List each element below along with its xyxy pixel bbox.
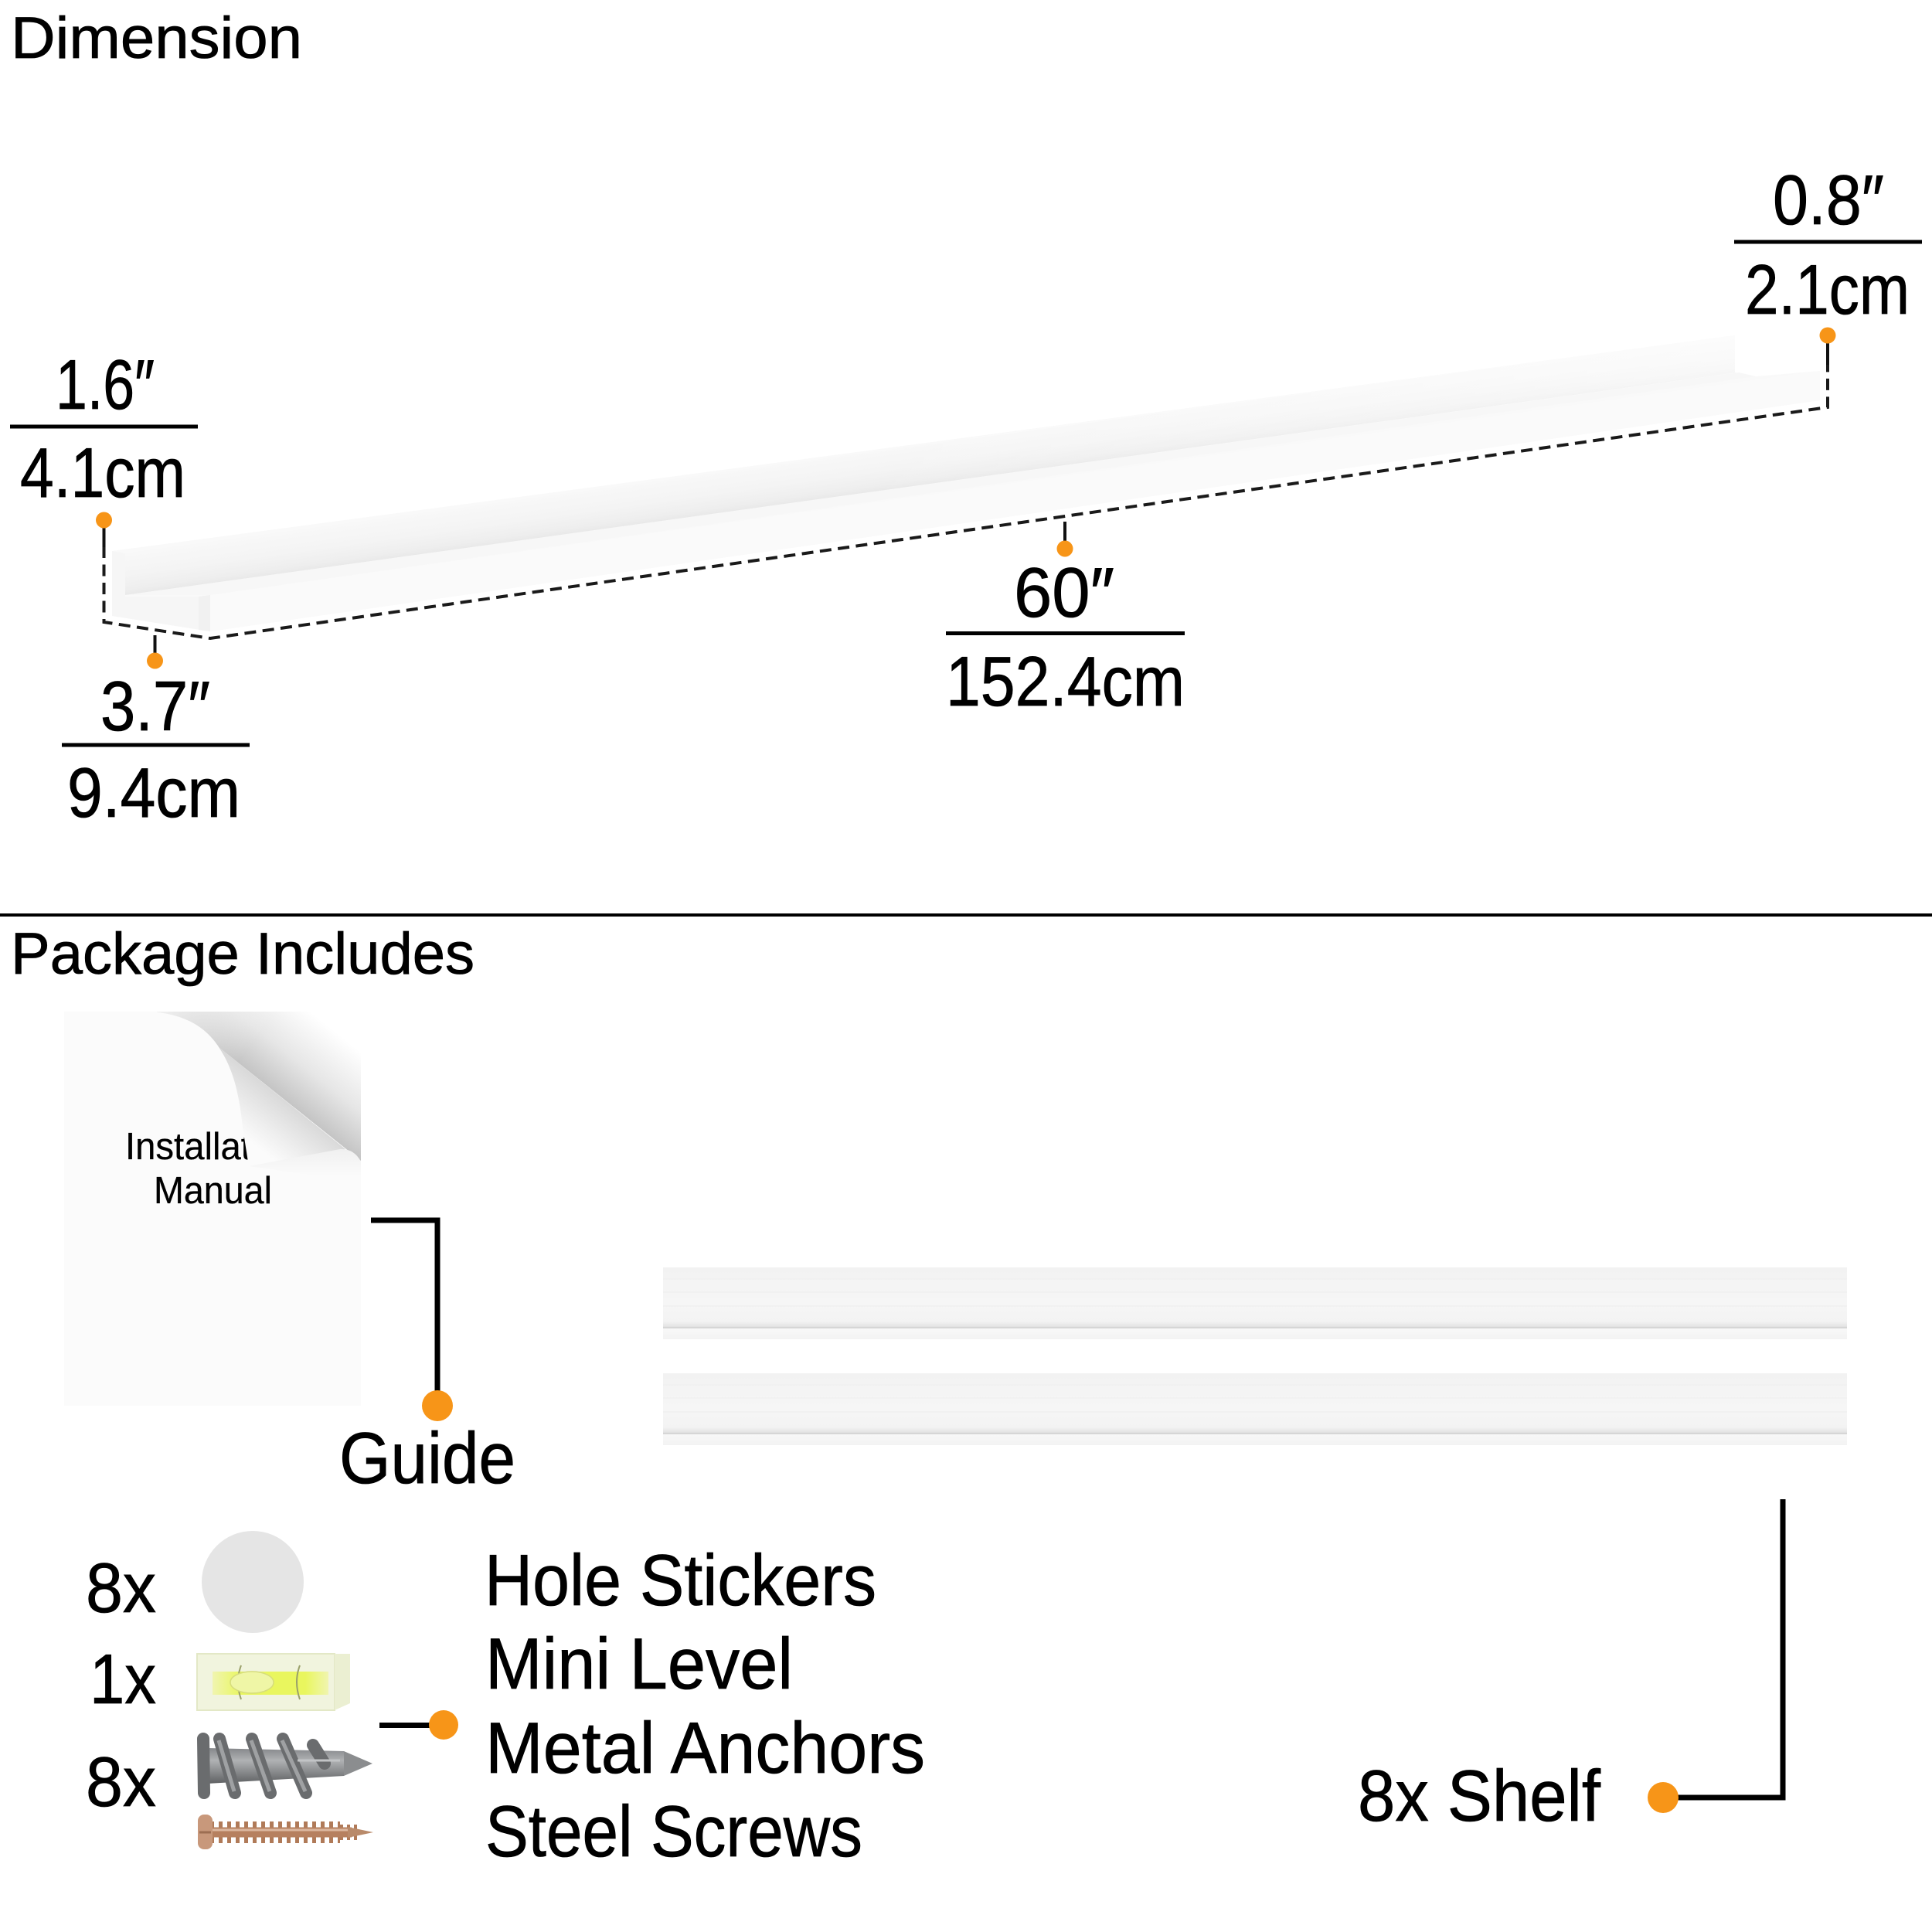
callout: height 1.6 inch — [10, 346, 198, 547]
callout: length 60 inch — [946, 522, 1185, 721]
heading: Package Includes: Package Includes — [11, 921, 474, 987]
icon: metal anchor — [203, 1739, 372, 1793]
panel: dimension — [10, 5, 1922, 832]
list: hardware names: Steel Screws — [485, 1791, 862, 1872]
heading: Dimension: Dimension — [11, 5, 302, 71]
list: hardware names — [485, 1539, 925, 1872]
icon: steel screw — [198, 1815, 373, 1849]
callout: lip height 0.8 inch: 0.8″ — [1773, 162, 1884, 240]
quantities: hardware counts — [86, 1549, 156, 1821]
callout: length 60 inch: 60″ — [1014, 554, 1114, 632]
callout: depth 3.7 inch: 3.7″ — [100, 668, 210, 746]
leader: guide — [371, 1220, 453, 1421]
callout: lip height 0.8 inch — [1734, 162, 1922, 365]
panel: package includes — [11, 921, 1847, 1872]
section divider — [0, 913, 1932, 917]
leader: shelf — [1677, 1499, 1783, 1798]
callout: depth 3.7 inch: 9.4cm — [67, 754, 240, 832]
dashed outline: length and depth — [104, 365, 1828, 638]
quantities: hardware counts: 1x — [90, 1641, 156, 1719]
quantities: hardware counts: 8x — [86, 1743, 156, 1821]
list: hardware names: Hole Stickers — [485, 1539, 876, 1621]
illustration: L-shaped white ledge shelf — [112, 335, 1820, 631]
leader: hardware — [379, 1710, 458, 1740]
illustration: installation manual with page curl — [64, 1012, 361, 1406]
callout: height 1.6 inch: 1.6″ — [56, 346, 155, 424]
callout: length 60 inch: 152.4cm — [946, 643, 1185, 721]
callout: depth 3.7 inch — [62, 635, 250, 832]
quantities: hardware counts: 8x — [86, 1549, 156, 1628]
label: 8x Shelf: 8x Shelf — [1358, 1755, 1601, 1836]
illustration: installation manual with page curl: Manual — [154, 1170, 272, 1212]
icon: mini level — [197, 1654, 350, 1710]
callout: lip height 0.8 inch: 2.1cm — [1745, 251, 1910, 329]
label: Guide: Guide — [339, 1417, 515, 1498]
callout: height 1.6 inch: 4.1cm — [20, 434, 185, 512]
list: hardware names: Mini Level — [485, 1623, 793, 1704]
marker: shelf — [1648, 1782, 1679, 1813]
illustration: installation manual with page curl: Installation — [125, 1126, 300, 1168]
illustration: top view of two shelves — [663, 1267, 1847, 1445]
list: hardware names: Metal Anchors — [485, 1707, 925, 1788]
icon: hole sticker — [202, 1531, 304, 1633]
